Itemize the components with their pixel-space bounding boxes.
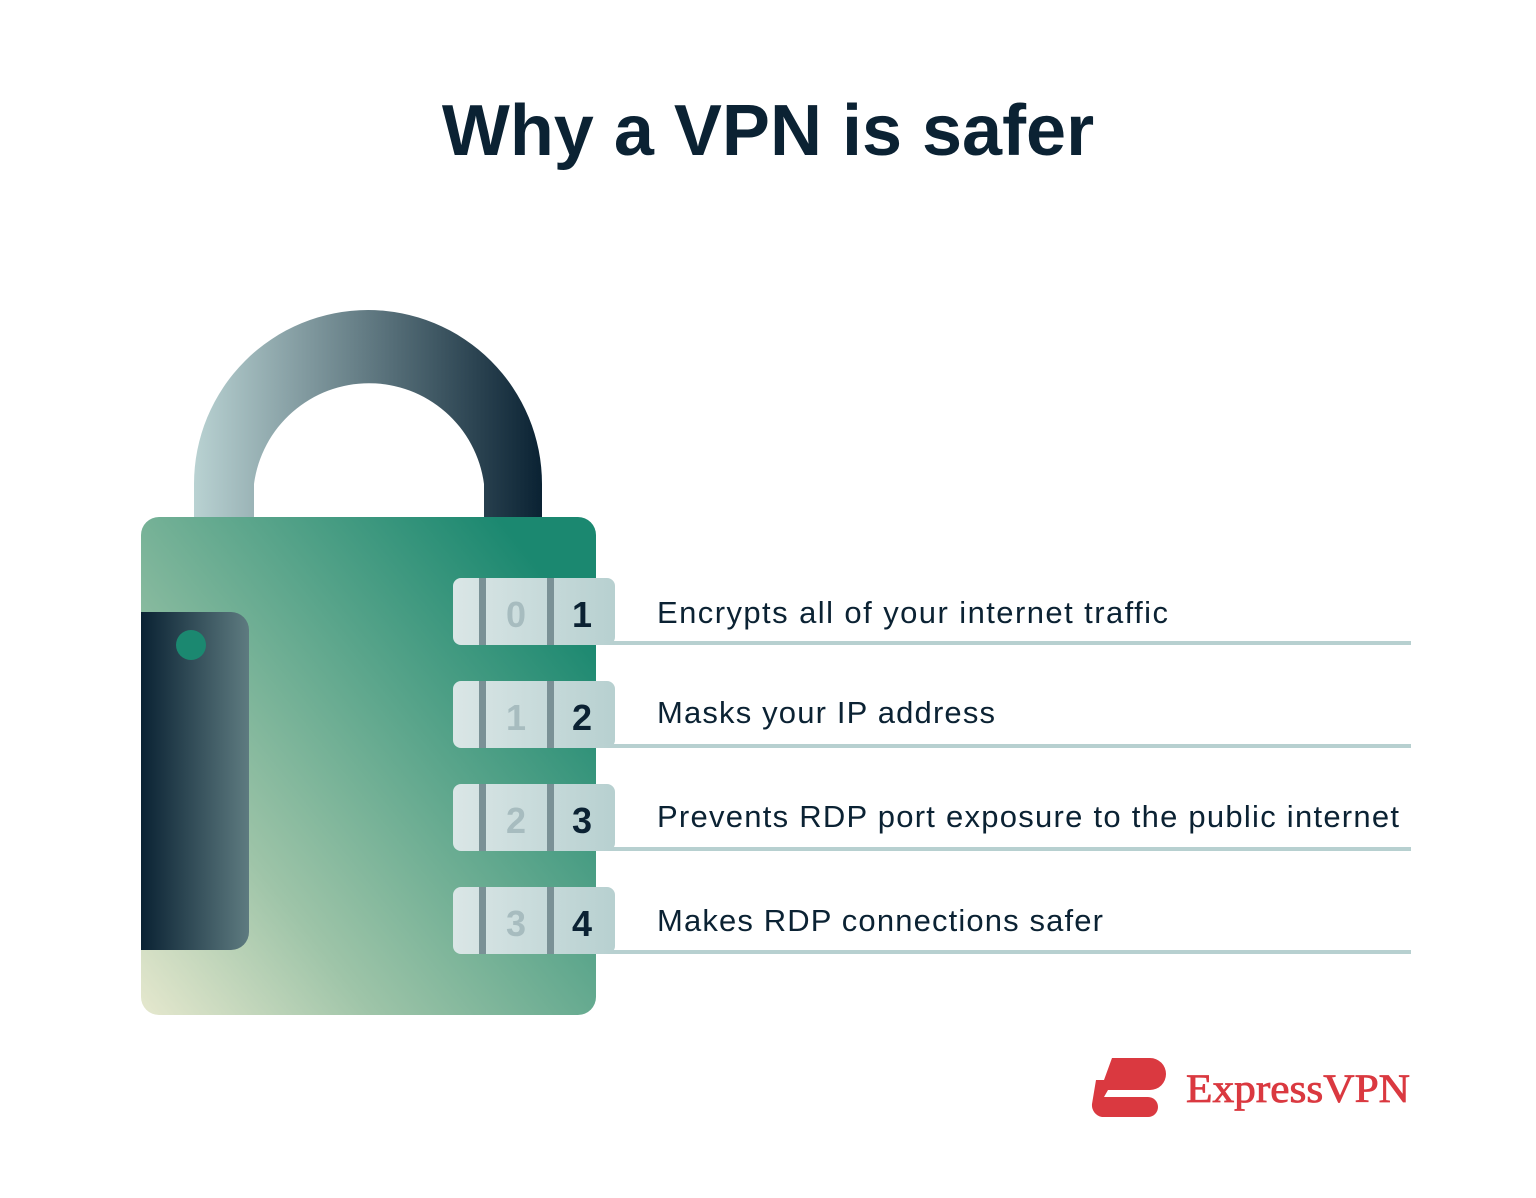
row 4: 3 [506,903,526,944]
title: Why a VPN is safer [442,91,1094,171]
row 1: Encrypts all of your internet traffic [657,595,1168,630]
row 2: Masks your IP address [657,695,995,730]
row 1: 0 [506,594,526,635]
row 2 [453,681,1411,748]
row 4: Makes RDP connections safer [657,903,1103,938]
row 4: 4 [572,903,592,944]
row 2: 2 [572,697,592,738]
row 3: Prevents RDP port exposure to the public internet [657,799,1399,834]
row 3: 3 [572,800,592,841]
lock body [141,517,596,1015]
logo: ExpressVPN [1092,1058,1410,1117]
logo: ExpressVPN: ExpressVPN [1186,1066,1410,1111]
row 3: 2 [506,800,526,841]
row 2: 1 [506,697,526,738]
row 1 [453,578,1411,645]
row 4 [453,887,1411,954]
row 3 [453,784,1411,851]
shackle [194,310,542,517]
side panel with dot [141,612,249,950]
row 1: 1 [572,594,592,635]
